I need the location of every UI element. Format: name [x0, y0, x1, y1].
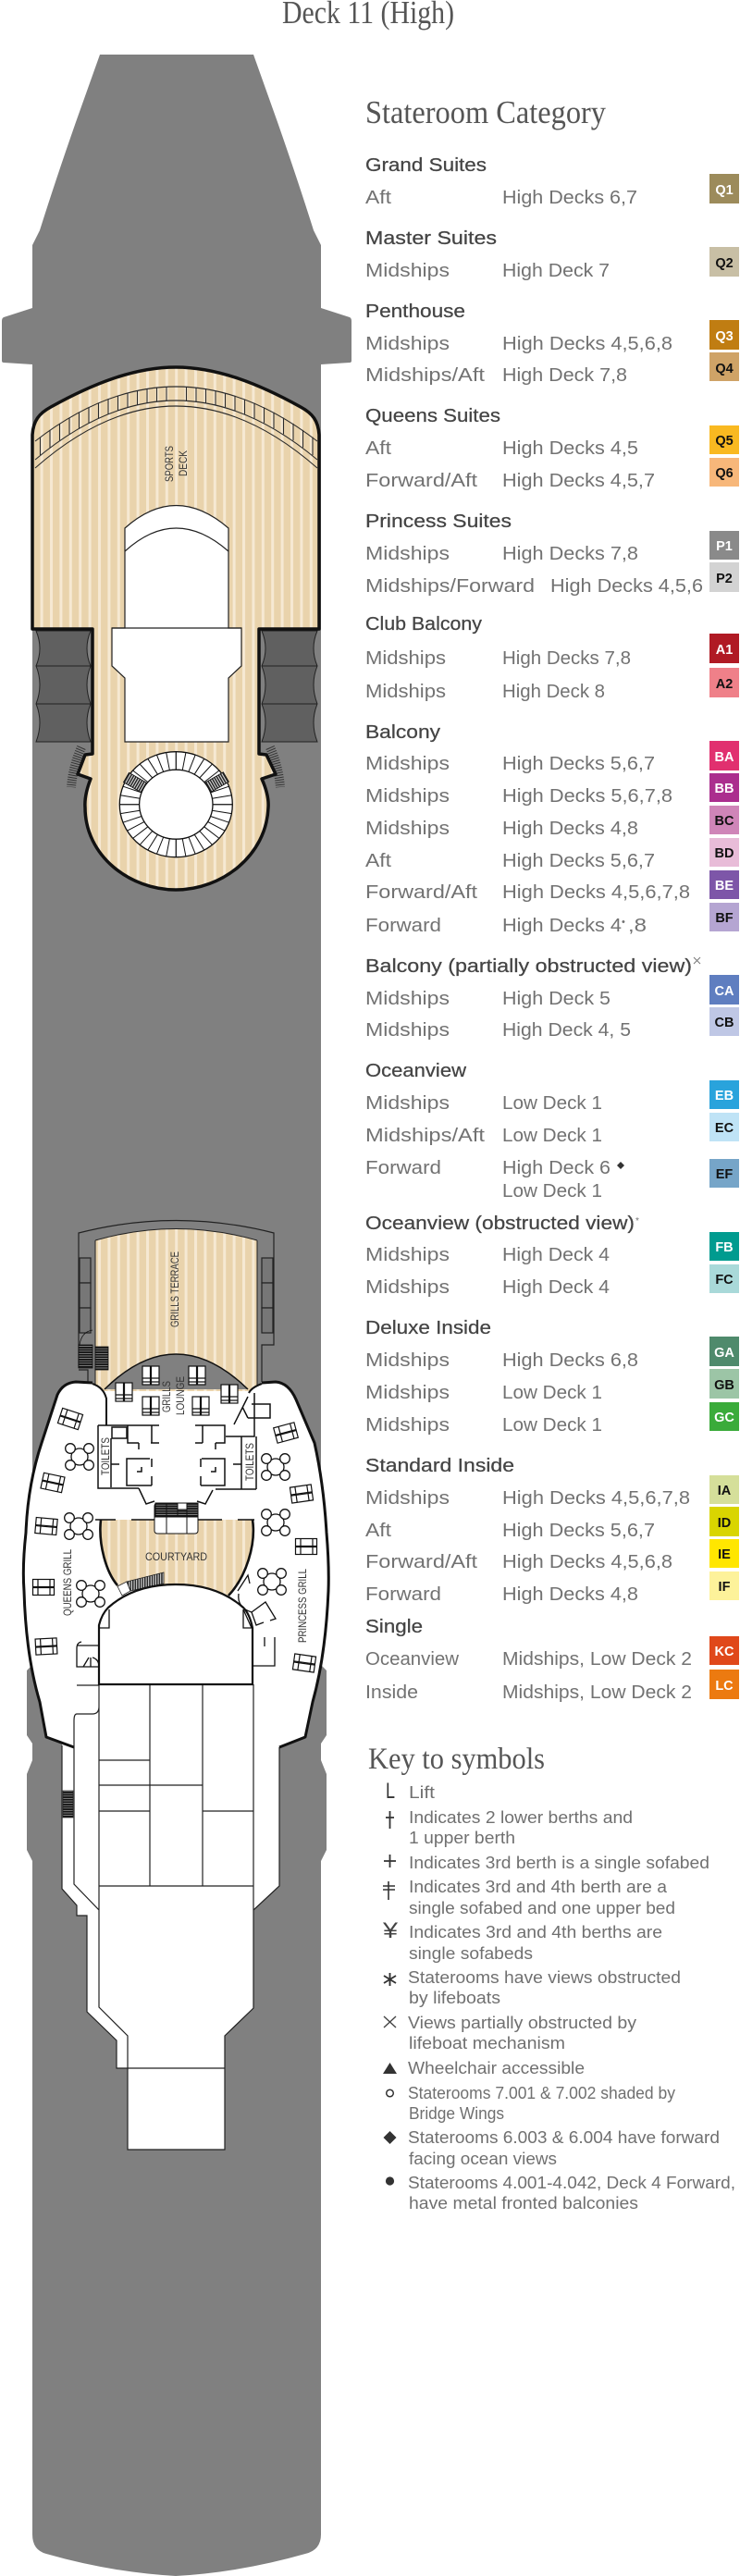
club balcony: A2	[716, 677, 733, 692]
deluxe inside: Low Deck 1	[502, 1383, 602, 1403]
penthouse: High Deck 7,8	[502, 365, 627, 386]
oceanview obstructed	[365, 1214, 739, 1298]
oceanview obstructed: Midships	[365, 1277, 450, 1298]
balcony: Forward	[365, 916, 441, 936]
stern block white floor	[62, 1739, 279, 2150]
master suites: Q2	[715, 256, 734, 271]
balcony: Midships	[365, 786, 450, 807]
grand suites: Aft	[365, 188, 392, 208]
deluxe inside: GC	[714, 1411, 734, 1425]
key: dagger: Indicates 2 lower berths and	[409, 1808, 633, 1827]
label: sports deck: DECK	[177, 450, 190, 476]
balcony partially obstructed: High Deck 5	[502, 989, 610, 1009]
deluxe inside: Midships	[365, 1415, 450, 1436]
oceanview: High Deck 6	[502, 1158, 610, 1178]
key: dot: Staterooms 4.001-4.042, Deck 4 Forward,	[408, 2174, 735, 2192]
key: yen: ¥	[382, 1918, 399, 1943]
room labels: TOILETS	[243, 1443, 256, 1481]
master suites	[365, 228, 739, 281]
princess suites: P2	[716, 572, 733, 586]
oceanview obstructed: Oceanview (obstructed view)	[365, 1214, 635, 1234]
standard inside: Forward/Aft	[365, 1552, 478, 1572]
label: sports deck: SPORTS	[163, 446, 176, 482]
queens suites: High Decks 4,5,7	[502, 471, 655, 491]
balcony: Balcony	[365, 722, 440, 743]
club balcony: Midships	[365, 648, 446, 669]
key: dot: have metal fronted balconies	[409, 2194, 638, 2212]
oceanview: EF	[716, 1167, 733, 1182]
queens suites: High Decks 4,5	[502, 438, 638, 459]
standard inside: IF	[719, 1580, 731, 1595]
club balcony: High Decks 7,8	[502, 648, 631, 669]
oceanview: EB	[715, 1089, 734, 1103]
balcony: Midships	[365, 819, 450, 839]
oceanview obstructed: High Deck 4	[502, 1245, 610, 1265]
key: triangle: Wheelchair accessible	[408, 2059, 585, 2077]
penthouse: Q4	[715, 362, 734, 376]
club balcony: High Deck 8	[502, 682, 605, 702]
oceanview: Low Deck 1	[502, 1093, 602, 1114]
princess suites: High Decks 7,8	[502, 544, 638, 564]
key: double dagger: Indicates 3rd and 4th berth are a	[409, 1878, 668, 1896]
door details	[77, 1575, 276, 1667]
round tables	[65, 1444, 290, 1607]
bump inner curves	[92, 1384, 262, 1425]
princess suites: Princess Suites	[365, 512, 512, 532]
balcony: High Decks 5,6,7,8	[502, 786, 672, 807]
oceanview: Forward	[365, 1158, 441, 1178]
master suites: Master Suites	[365, 228, 497, 249]
balcony partially obstructed: CA	[715, 984, 734, 999]
queens suites: Queens Suites	[365, 406, 500, 426]
deluxe inside: GA	[714, 1346, 734, 1361]
balcony: High Decks 5,6,7	[502, 754, 655, 774]
standard inside: High Decks 5,6,7	[502, 1521, 655, 1541]
stateroom category list	[365, 155, 739, 1703]
wooden deck floor	[32, 367, 319, 890]
penthouse: High Decks 4,5,6,8	[502, 334, 672, 354]
key: double dagger	[383, 1878, 675, 1917]
oceanview: EC	[715, 1121, 734, 1136]
key: lift: L	[386, 1779, 395, 1804]
lifeboat left	[36, 631, 91, 742]
balcony: High Decks 4,5,6,7,8	[502, 882, 690, 903]
standard inside: Forward	[365, 1584, 441, 1605]
standard inside: Standard Inside	[365, 1456, 514, 1476]
standard inside: High Decks 4,5,6,7,8	[502, 1488, 690, 1509]
ship hull silhouette	[2, 55, 352, 2576]
oceanview: Midships/Aft	[365, 1126, 486, 1146]
penthouse: Q3	[715, 329, 734, 344]
key: asterisk: by lifeboats	[409, 1989, 500, 2007]
master suites: Midships	[365, 261, 450, 281]
grand suites: Q1	[715, 183, 734, 198]
grand suites: Grand Suites	[365, 155, 487, 176]
oceanview	[365, 1061, 739, 1202]
single	[365, 1617, 739, 1703]
key: yen: Indicates 3rd and 4th berths are	[409, 1923, 662, 1941]
key: dagger: 1 upper berth	[409, 1829, 515, 1847]
grill white floor	[23, 1382, 328, 1747]
penthouse	[365, 302, 739, 386]
main superstructure	[23, 1354, 328, 2150]
single: Single	[365, 1617, 423, 1637]
single: Midships, Low Deck 2	[502, 1649, 692, 1670]
key: open circle: Staterooms 7.001 & 7.002 shaded by	[408, 2084, 675, 2102]
wing hatching	[71, 747, 280, 787]
club balcony: A1	[716, 643, 733, 658]
queens suites: Aft	[365, 438, 392, 459]
key: diamond	[383, 2128, 720, 2168]
balcony: BC	[715, 814, 734, 829]
key: yen	[382, 1918, 662, 1963]
grill outer wall	[23, 1382, 328, 1747]
single: KC	[715, 1645, 734, 1659]
key: open circle: Bridge Wings	[409, 2104, 504, 2123]
balcony: Midships	[365, 754, 450, 774]
balcony: High Decks 4,8	[502, 819, 638, 839]
grand suites: High Decks 6,7	[502, 188, 637, 208]
queens suites	[365, 406, 739, 491]
balcony: •	[622, 917, 625, 928]
key: plus: Indicates 3rd berth is a single sofabed	[409, 1854, 709, 1872]
balcony: ,8	[628, 916, 647, 936]
key: lift	[386, 1779, 435, 1804]
sofas	[33, 1408, 316, 1672]
room labels: GRILLS	[160, 1381, 173, 1412]
princess suites	[365, 512, 739, 597]
deck railing	[35, 387, 317, 468]
balcony partially obstructed: CB	[715, 1016, 734, 1030]
balcony: High Decks 5,6,7	[502, 851, 655, 871]
room labels	[61, 1376, 309, 1643]
oceanview: Low Deck 1	[502, 1181, 602, 1202]
courtyard stairs	[117, 1582, 130, 1596]
club balcony	[365, 614, 739, 702]
queens suites: Q6	[715, 466, 734, 481]
terrace seats	[80, 1258, 273, 1333]
grills lounge walls	[95, 1393, 270, 1520]
standard inside: IE	[718, 1547, 731, 1562]
key: diamond: Staterooms 6.003 & 6.004 have forward	[408, 2128, 720, 2147]
deluxe inside: Midships	[365, 1350, 450, 1371]
inner arch block	[99, 1584, 253, 1684]
balcony: Forward/Aft	[365, 882, 478, 903]
deluxe inside: GB	[714, 1378, 734, 1393]
master suites: High Deck 7	[502, 261, 610, 281]
lounge window arc	[105, 1354, 248, 1389]
queens suites: Forward/Aft	[365, 471, 478, 491]
deluxe inside: Low Deck 1	[502, 1415, 602, 1436]
terrace stairs	[79, 1330, 108, 1370]
standard inside	[365, 1456, 739, 1605]
key: dot	[386, 2174, 735, 2212]
standard inside: High Decks 4,5,6,8	[502, 1552, 672, 1572]
key: asterisk: Staterooms have views obstructed	[408, 1968, 681, 1987]
oceanview obstructed: Midships	[365, 1245, 450, 1265]
balcony	[365, 722, 739, 936]
label: grills terrace: GRILLS TERRACE	[168, 1251, 181, 1327]
queens suites: Q5	[715, 434, 734, 449]
deluxe inside	[365, 1318, 739, 1436]
label: sports deck	[163, 446, 190, 482]
heading: stateroom category: Stateroom Category	[365, 94, 606, 130]
oceanview obstructed: High Deck 4	[502, 1277, 610, 1298]
oceanview: Low Deck 1	[502, 1126, 602, 1146]
standard inside: IA	[718, 1484, 732, 1498]
balcony: BD	[715, 846, 734, 861]
stern stairs	[63, 1791, 73, 1818]
princess suites: High Decks 4,5,6	[550, 576, 703, 597]
standard inside: Aft	[365, 1521, 392, 1541]
key: diamond: facing ocean views	[409, 2150, 557, 2168]
balcony: BE	[715, 879, 734, 894]
balcony partially obstructed	[365, 956, 739, 1041]
standard inside: ID	[718, 1516, 731, 1531]
oceanview: Midships	[365, 1093, 450, 1114]
key: cross	[384, 2014, 636, 2052]
balcony: High Decks 4	[502, 916, 622, 936]
room labels: LOUNGE	[174, 1376, 187, 1415]
single: Midships, Low Deck 2	[502, 1682, 692, 1703]
sports deck	[32, 367, 319, 890]
penthouse: Penthouse	[365, 302, 465, 322]
room labels: TOILETS	[99, 1437, 112, 1475]
balcony partially obstructed: High Deck 4, 5	[502, 1020, 631, 1041]
key: dagger	[386, 1808, 633, 1847]
balcony partially obstructed: Midships	[365, 1020, 450, 1041]
balcony: BF	[715, 911, 734, 926]
terrace frame	[79, 1221, 274, 1382]
balcony: BB	[715, 782, 734, 796]
balcony partially obstructed: Balcony (partially obstructed view)	[365, 956, 692, 977]
lifeboat right	[262, 631, 317, 742]
standard inside: High Decks 4,8	[502, 1584, 638, 1605]
oceanview obstructed: *	[635, 1216, 639, 1226]
standard inside: Midships	[365, 1488, 450, 1509]
grills terrace	[79, 1221, 274, 1393]
club balcony: Midships	[365, 682, 446, 702]
balcony: Aft	[365, 851, 392, 871]
key: asterisk	[384, 1968, 681, 2007]
princess suites: Midships/Forward	[365, 576, 535, 597]
deluxe inside: High Decks 6,8	[502, 1350, 638, 1371]
circular seating	[119, 752, 232, 857]
princess suites: Midships	[365, 544, 450, 564]
single: Oceanview	[365, 1649, 460, 1670]
lounge chairs	[116, 1366, 238, 1415]
room labels: QUEENS GRILL	[61, 1549, 74, 1616]
key: double dagger: single sofabed and one upper bed	[409, 1899, 675, 1917]
penthouse: Midships	[365, 334, 450, 354]
key: lift: Lift	[409, 1783, 435, 1802]
club balcony: Club Balcony	[365, 614, 482, 635]
key: open circle	[387, 2084, 675, 2123]
label: courtyard: COURTYARD	[145, 1550, 207, 1563]
wooden terrace floor	[95, 1228, 257, 1393]
princess suites: P1	[716, 539, 733, 554]
key to symbols list	[382, 1779, 735, 2212]
oceanview obstructed: FB	[715, 1240, 734, 1255]
room labels: PRINCESS GRILL	[296, 1569, 309, 1643]
central white housing	[112, 505, 241, 742]
key: yen: single sofabeds	[409, 1944, 533, 1963]
courtyard	[100, 1520, 253, 1596]
oceanview: Oceanview	[365, 1061, 467, 1081]
oceanview obstructed: FC	[715, 1273, 734, 1288]
balcony partially obstructed: Midships	[365, 989, 450, 1009]
deluxe inside: Midships	[365, 1383, 450, 1403]
key: cross: lifeboat mechanism	[409, 2034, 565, 2052]
central stairs	[154, 1503, 198, 1534]
stern outlines	[62, 1684, 279, 2150]
single: LC	[715, 1679, 734, 1694]
deluxe inside: Deluxe Inside	[365, 1318, 491, 1338]
single: Inside	[365, 1682, 418, 1703]
heading: key to symbols: Key to symbols	[368, 1743, 545, 1776]
penthouse: Midships/Aft	[365, 365, 486, 386]
balcony: BA	[715, 750, 734, 765]
grand suites	[365, 155, 739, 208]
key: cross: Views partially obstructed by	[408, 2014, 636, 2032]
